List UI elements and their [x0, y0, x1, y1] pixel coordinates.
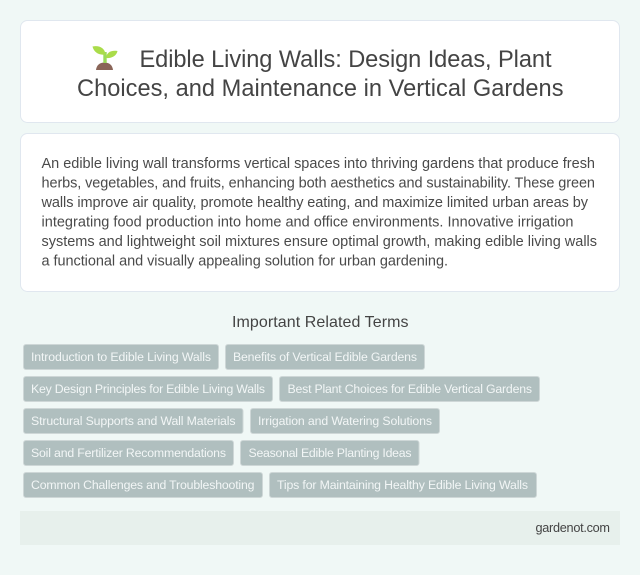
tag: Soil and Fertilizer Recommendations: [31, 446, 226, 460]
title: Edible Living Walls: Design Ideas, Plant: [140, 47, 552, 73]
tag: [24, 344, 218, 370]
tag: Common Challenges and Troubleshooting: [31, 478, 255, 492]
tag: [280, 376, 540, 402]
text block: description: integrating food production into home and office environments. Innovative irrigation: [42, 214, 574, 230]
tag: Benefits of Vertical Edible Gardens: [233, 350, 417, 364]
title: [77, 47, 564, 102]
tag: [240, 440, 419, 466]
tag: Best Plant Choices for Edible Vertical Gardens: [288, 382, 532, 396]
tag: Irrigation and Watering Solutions: [258, 414, 432, 428]
text block: description: systems and lightweight soil mixtures ensure optimal growth, making edible living walls: [42, 234, 597, 250]
tag: Seasonal Edible Planting Ideas: [248, 446, 412, 460]
tag: Key Design Principles for Edible Living Walls: [31, 382, 265, 396]
icon: seedling: [92, 46, 118, 70]
panel: description card: [20, 134, 620, 292]
tag: Structural Supports and Wall Materials: [31, 414, 236, 428]
text block: description: [40, 156, 597, 270]
panel: title card: [20, 20, 620, 122]
tag: [24, 440, 234, 466]
text block: description: a functional and visually appealing solution for urban gardening.: [42, 254, 448, 270]
footer: gardenot.com: [536, 521, 610, 535]
text block: description: walls improve air quality, promote healthy eating, and maximize limited urban areas by: [40, 195, 589, 211]
tag: [250, 408, 440, 434]
tag: Introduction to Edible Living Walls: [31, 350, 211, 364]
tag: Tips for Maintaining Healthy Edible Living Walls: [277, 478, 528, 492]
title: Choices, and Maintenance in Vertical Gardens: [77, 76, 564, 102]
tag: [270, 472, 536, 498]
text block: description: herbs, vegetables, and fruits, enhancing both aesthetics and sustainability. These green: [42, 176, 595, 192]
tag: [24, 376, 272, 402]
tag: [24, 408, 243, 434]
heading: important related terms: Important Related Terms: [232, 314, 408, 331]
footer: [20, 511, 620, 545]
tag: [24, 472, 262, 498]
tag: [226, 344, 424, 370]
text block: description: An edible living wall transforms vertical spaces into thriving gardens that produce fresh: [42, 156, 595, 172]
tag list: [24, 344, 540, 498]
